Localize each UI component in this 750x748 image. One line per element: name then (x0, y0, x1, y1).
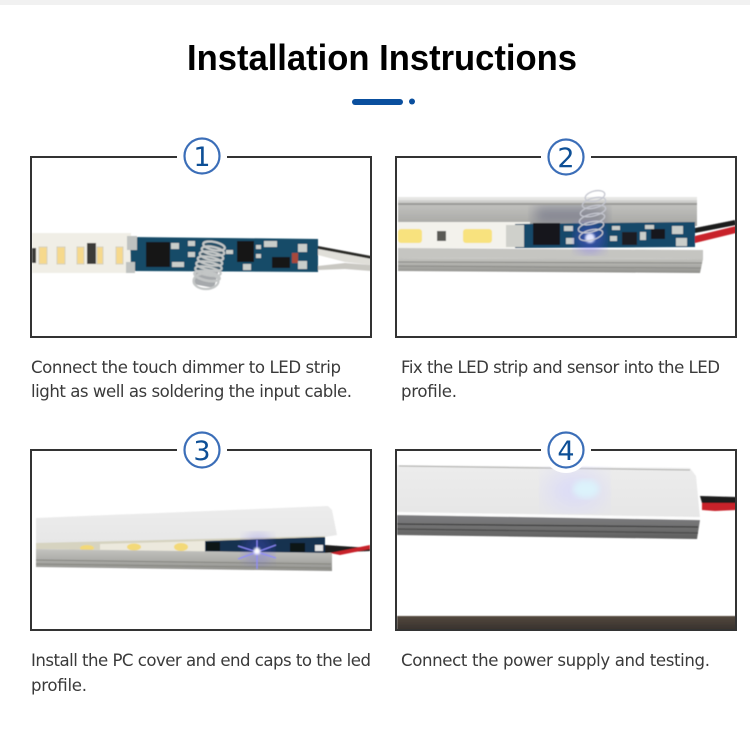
caption 2: Fix the LED strip and sensor into the LED (401, 358, 720, 377)
title accent (352, 98, 415, 105)
top strip (0, 0, 750, 5)
caption 2: profile. (401, 382, 457, 401)
number badge 2 (548, 140, 584, 174)
panel: step 4 (396, 427, 736, 670)
caption 1: light as well as soldering the input cable. (31, 382, 352, 401)
photo: PC cover fitted on profile (36, 506, 370, 571)
number badge 4: 4 (557, 436, 575, 467)
frame (396, 157, 736, 337)
number badge 3 (184, 432, 220, 468)
panel: step 2 (396, 140, 736, 401)
caption 4: Connect the power supply and testing. (401, 651, 710, 670)
caption 3: Install the PC cover and end caps to the led (31, 651, 371, 670)
number badge 1 (184, 138, 220, 174)
caption 3: profile. (31, 676, 87, 695)
photo: finished profile lit (397, 465, 736, 630)
frame (396, 450, 736, 630)
panel: step 1 (31, 138, 371, 401)
photo: LED strip and sensor in profile (398, 189, 736, 273)
spring (577, 189, 607, 243)
number badge 1: 1 (193, 142, 211, 173)
caption 3 (31, 651, 371, 695)
frame (31, 157, 371, 337)
caption 1: Connect the touch dimmer to LED strip (31, 358, 341, 377)
number badge 2: 2 (557, 143, 575, 174)
panel: step 3 (31, 432, 371, 695)
frame (31, 450, 371, 630)
number badge 3: 3 (193, 436, 211, 467)
caption 1 (31, 358, 352, 401)
caption 2 (401, 358, 720, 401)
spring (193, 240, 226, 289)
title: Installation Instructions (187, 37, 577, 78)
photo: touch dimmer on LED strip (32, 233, 371, 289)
number badge 4 (543, 427, 589, 473)
